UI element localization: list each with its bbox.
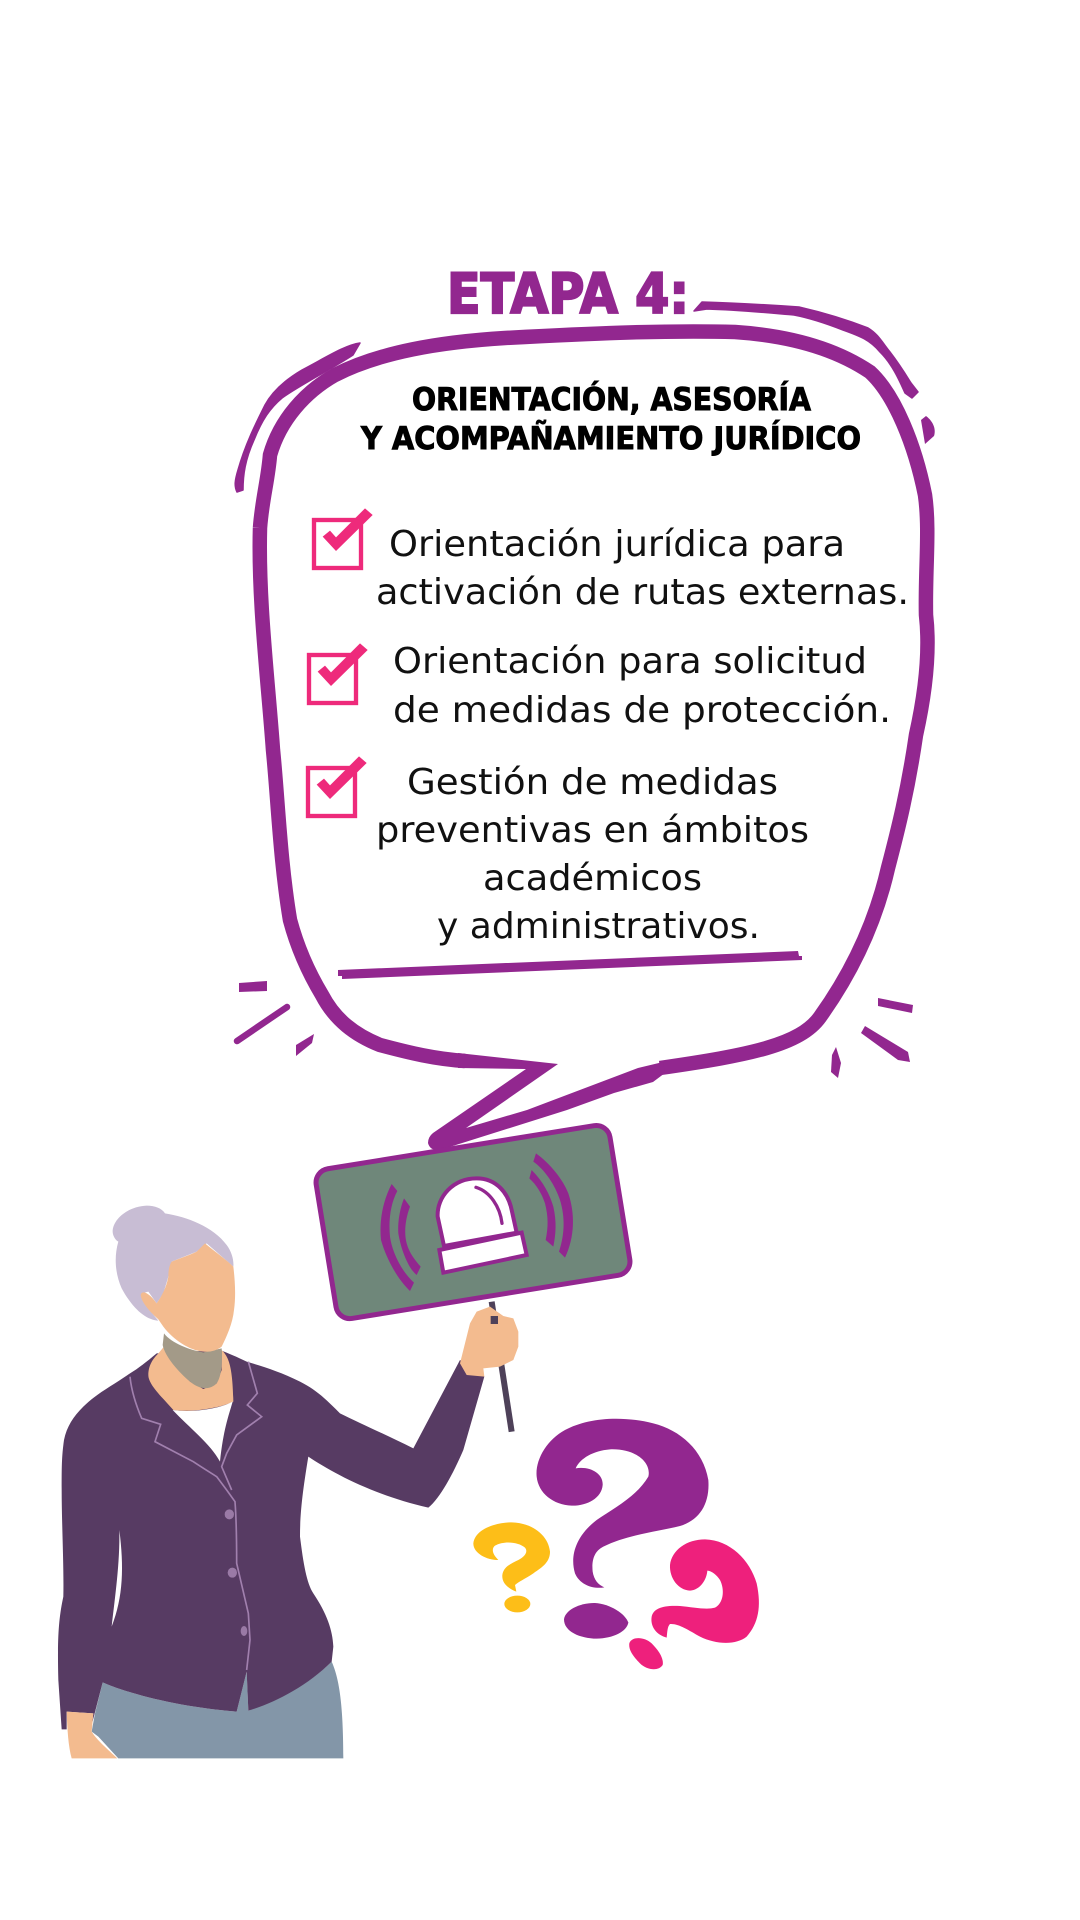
- sign with alarm icon: [314, 1123, 632, 1321]
- icon: sound waves: [381, 1153, 573, 1291]
- purple question mark: [537, 1419, 709, 1639]
- bubble outline: [260, 331, 928, 1068]
- pole: [492, 1302, 512, 1432]
- subtitle: Y ACOMPAÑAMIENTO JURÍDICO: [360, 419, 861, 457]
- yellow question mark: [473, 1522, 550, 1612]
- accent mark: right: [921, 416, 935, 444]
- item 1 text: Orientación jurídica para: [389, 524, 845, 565]
- underline: [338, 951, 802, 979]
- checkbox 3: [308, 756, 367, 816]
- accent marks: bottom right: [831, 998, 913, 1078]
- item 3 text: preventivas en ámbitos: [376, 810, 809, 851]
- accent stroke: top left: [235, 343, 360, 492]
- sign board: [314, 1123, 632, 1321]
- speech bubble: [235, 302, 935, 1150]
- accent stroke: top right: [694, 302, 918, 398]
- jacket: [58, 1350, 484, 1729]
- item 2 text: de medidas de protección.: [393, 690, 891, 731]
- item 2 text: Orientación para solicitud: [393, 641, 867, 682]
- shirt: [173, 1402, 233, 1462]
- item 3 text: y administrativos.: [437, 906, 760, 947]
- neck shadow: [163, 1333, 222, 1388]
- skirt: [92, 1662, 343, 1758]
- pole between fingers: [483, 1316, 505, 1324]
- arm gap: [112, 1530, 122, 1627]
- right hand: [460, 1307, 518, 1377]
- item 2 text: [393, 641, 891, 731]
- title: ETAPA 4:: [447, 262, 689, 326]
- chest skin: [148, 1347, 233, 1411]
- face: [141, 1243, 235, 1352]
- item 1 text: [376, 524, 909, 613]
- alarm icon: [381, 1153, 573, 1291]
- lapel stitching: [130, 1362, 262, 1670]
- subtitle: [360, 379, 861, 457]
- accent marks: bottom left: [237, 981, 314, 1056]
- item 3 text: Gestión de medidas: [407, 762, 778, 803]
- icon: alarm dome: [438, 1178, 517, 1246]
- buttons: [225, 1509, 247, 1636]
- question marks: [473, 1419, 759, 1669]
- hair: [113, 1206, 233, 1321]
- icon: alarm highlight: [476, 1187, 502, 1223]
- item 3 text: académicos: [483, 858, 702, 899]
- left hand: [67, 1712, 117, 1758]
- icon: alarm base: [439, 1233, 527, 1273]
- item 3 text: [376, 762, 809, 947]
- item 1 text: activación de rutas externas.: [376, 572, 909, 613]
- pink question mark: [629, 1539, 759, 1669]
- woman figure: [58, 1206, 518, 1758]
- checkbox 2: [309, 643, 368, 703]
- bubble tail: [428, 1053, 665, 1150]
- checkbox 1: [314, 508, 373, 568]
- subtitle: ORIENTACIÓN, ASESORÍA: [412, 379, 812, 418]
